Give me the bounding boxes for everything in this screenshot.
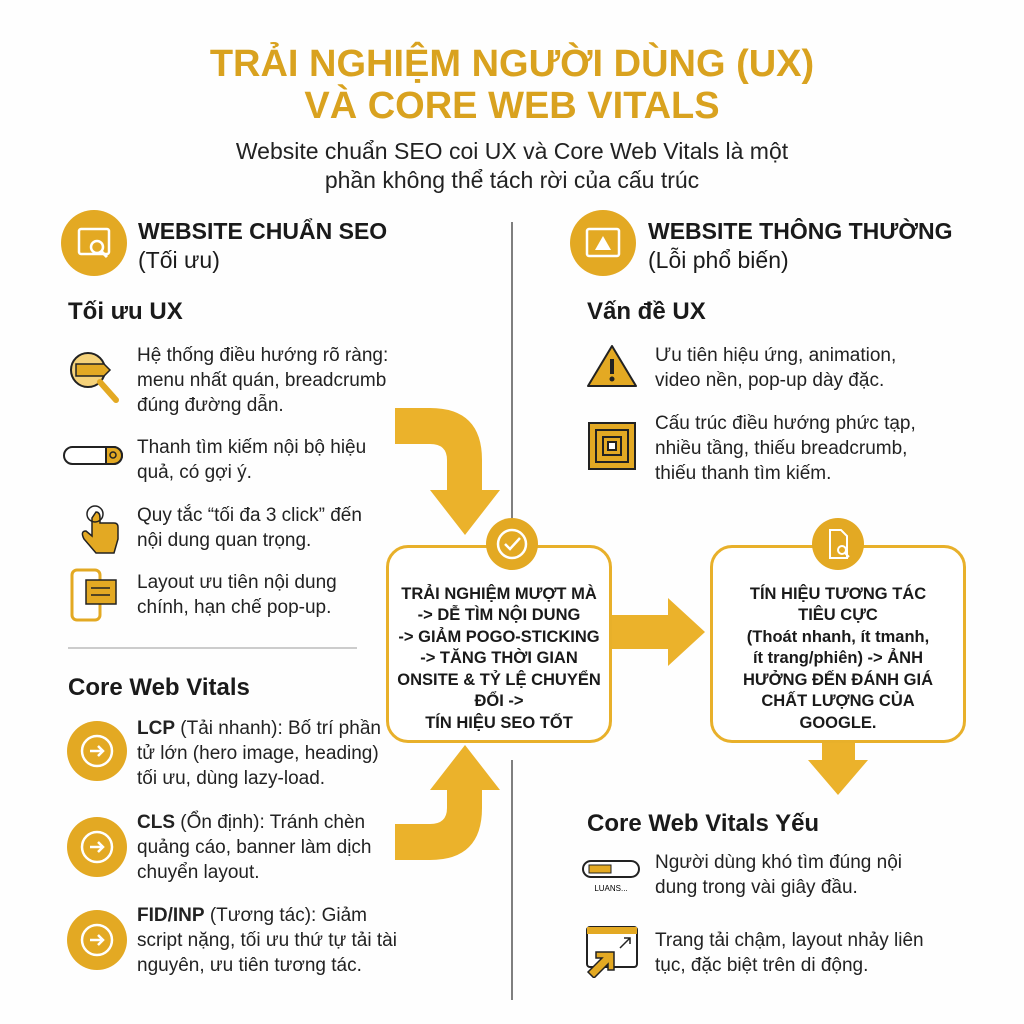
- text 3: Quy tắc “tối đa 3 click” đến: [137, 505, 362, 526]
- box: right: HƯỞNG ĐẾN ĐÁNH GIÁ: [743, 671, 933, 689]
- icon: phone: [70, 568, 117, 622]
- text 3: [137, 504, 362, 551]
- box: right: GOOGLE.: [799, 714, 876, 732]
- text 1: [137, 345, 388, 416]
- subtitle: phần không thể tách rời của cấu trúc: [325, 167, 699, 193]
- text CLS: CLS (Ổn định): Tránh chèn: [137, 812, 365, 833]
- text CLS: quảng cáo, banner làm dịch: [137, 837, 372, 858]
- text FID: FID/INP (Tương tác): Giảm: [137, 905, 367, 926]
- text 2: Thanh tìm kiếm nội bộ hiệu: [137, 437, 366, 458]
- icon window: [586, 926, 638, 978]
- right header: (Lỗi phổ biến): [648, 247, 789, 273]
- text 2: quả, có gợi ý.: [137, 462, 252, 483]
- text FID: script nặng, tối ưu thứ tự tải tài: [137, 930, 397, 951]
- box: center: ONSITE & TỶ LỆ CHUYỂN: [397, 671, 601, 689]
- box: right: [710, 545, 966, 743]
- text maze: thiếu thanh tìm kiếm.: [655, 463, 831, 484]
- box: center: ĐỔI ->: [474, 692, 524, 710]
- icon warning: [587, 345, 637, 387]
- icon: search bar: [63, 446, 123, 465]
- icon document: [812, 518, 864, 570]
- subtitle: Website chuẩn SEO coi UX và Core Web Vitals là một: [236, 138, 788, 164]
- box: center: TRẢI NGHIỆM MƯỢT MÀ: [401, 585, 597, 603]
- box: right: CHẤT LƯỢNG CỦA: [761, 692, 915, 710]
- icon loading: LUANS...: [594, 884, 628, 893]
- text window: tục, đặc biệt trên di động.: [655, 955, 868, 976]
- subtitle: [236, 138, 788, 193]
- text CLS: [137, 810, 372, 883]
- text window: [655, 930, 924, 976]
- title: [210, 42, 814, 127]
- text 4: Layout ưu tiên nội dung: [137, 572, 337, 593]
- right header: [648, 218, 952, 273]
- text CLS: chuyển layout.: [137, 862, 260, 883]
- text 1: Hệ thống điều hướng rõ ràng:: [137, 345, 388, 366]
- box: right: (Thoát nhanh, ít tmanh,: [747, 628, 929, 646]
- title: TRẢI NGHIỆM NGƯỜI DÙNG (UX): [210, 43, 814, 85]
- right header icon: [570, 210, 636, 276]
- text LCP: LCP (Tải nhanh): Bố trí phần: [137, 718, 381, 739]
- box: center: TÍN HIỆU SEO TỐT: [425, 714, 573, 732]
- icon: hand: [82, 505, 119, 554]
- icon: magnifier: [70, 352, 119, 403]
- box: center: [386, 545, 612, 743]
- box: right: TÍN HIỆU TƯƠNG TÁC: [750, 585, 926, 603]
- heading: Vấn đề UX: Vấn đề UX: [587, 298, 706, 325]
- text warn: Ưu tiên hiệu ứng, animation,: [655, 345, 896, 366]
- text LCP: [137, 718, 381, 789]
- text LCP: tử lớn (hero image, heading): [137, 743, 379, 764]
- text load: Người dùng khó tìm đúng nội: [655, 852, 902, 873]
- right header: WEBSITE THÔNG THƯỜNG: [648, 218, 952, 244]
- heading: Core Web Vitals: Core Web Vitals: [68, 674, 250, 701]
- box: center: -> GIẢM POGO-STICKING: [398, 628, 600, 646]
- text FID: [137, 905, 397, 976]
- box: right: TIÊU CỰC: [798, 606, 878, 624]
- left header: [138, 218, 387, 273]
- text 1: menu nhất quán, breadcrumb: [137, 370, 386, 391]
- text FID: nguyên, ưu tiên tương tác.: [137, 955, 362, 976]
- icon maze: [588, 422, 636, 470]
- heading: Core Web Vitals Yếu: Core Web Vitals Yếu: [587, 810, 819, 837]
- heading: Tối ưu UX: Tối ưu UX: [68, 298, 183, 325]
- text load: dung trong vài giây đầu.: [655, 877, 858, 898]
- box: center: -> TĂNG THỜI GIAN: [420, 649, 578, 667]
- text 4: [137, 572, 337, 618]
- text load: [655, 852, 902, 898]
- left header: WEBSITE CHUẨN SEO: [138, 218, 387, 244]
- text LCP: tối ưu, dùng lazy-load.: [137, 768, 325, 789]
- text 2: [137, 437, 366, 483]
- text maze: nhiều tầng, thiếu breadcrumb,: [655, 438, 907, 459]
- icon FID: [67, 910, 127, 970]
- box: center: -> DỄ TÌM NỘI DUNG: [418, 606, 580, 624]
- title: VÀ CORE WEB VITALS: [304, 85, 720, 127]
- text 1: đúng đường dẫn.: [137, 395, 284, 416]
- icon check: [486, 518, 538, 570]
- text maze: [655, 413, 916, 484]
- icon LCP: [67, 721, 127, 781]
- text window: Trang tải chậm, layout nhảy liên: [655, 930, 924, 951]
- icon CLS: [67, 817, 127, 877]
- text warn: [655, 345, 896, 391]
- icon loading: [582, 860, 640, 893]
- text 3: nội dung quan trọng.: [137, 530, 311, 551]
- left header: (Tối ưu): [138, 247, 220, 273]
- box: right: ít trang/phiên) -> ẢNH: [753, 649, 923, 667]
- text warn: video nền, pop-up dày đặc.: [655, 370, 884, 391]
- left header icon: [61, 210, 127, 276]
- text 4: chính, hạn chế pop-up.: [137, 597, 331, 618]
- text maze: Cấu trúc điều hướng phức tạp,: [655, 413, 916, 434]
